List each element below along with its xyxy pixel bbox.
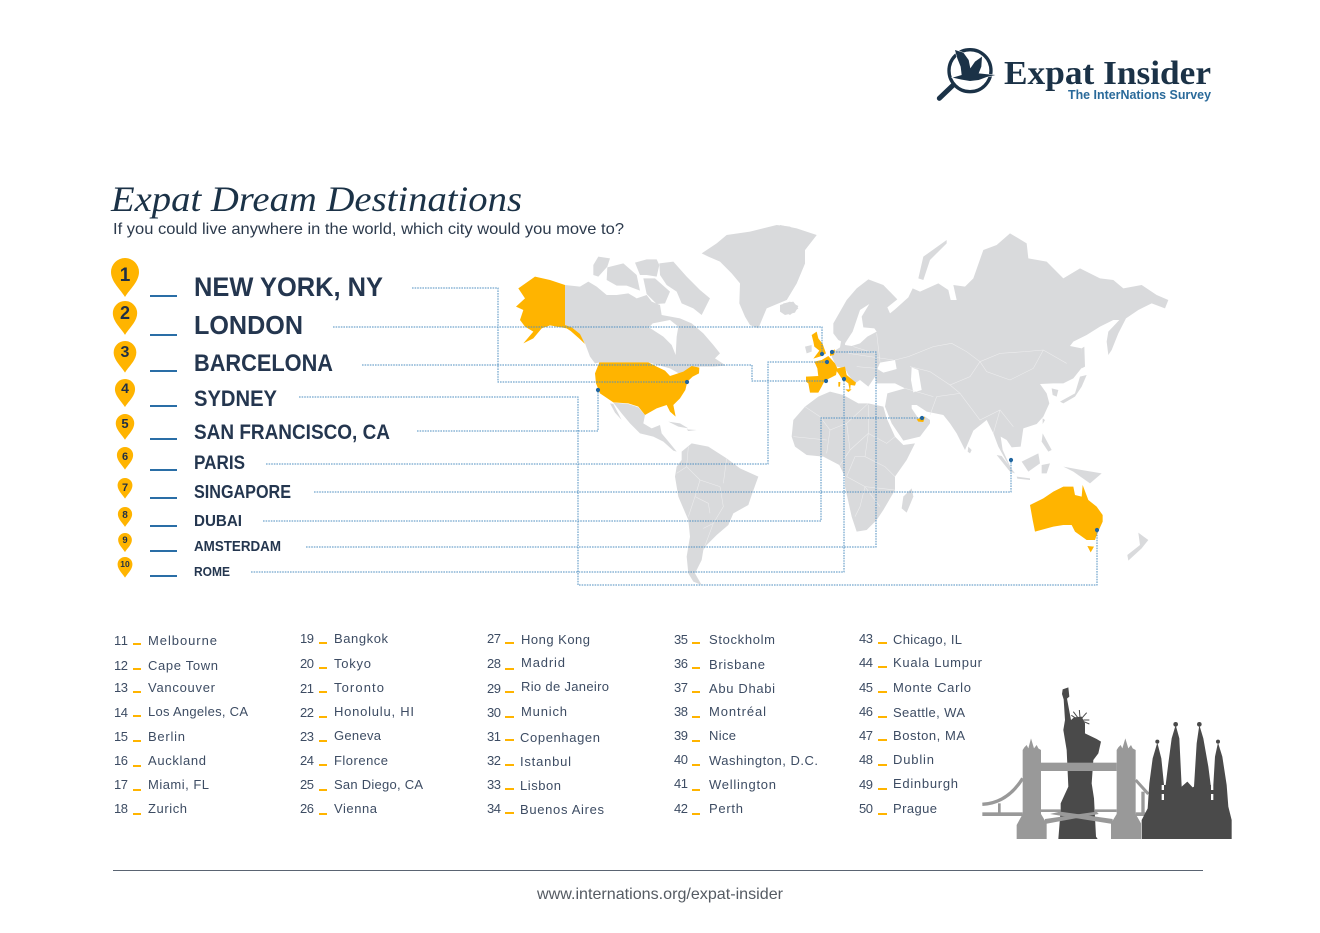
ranks 35 to 42: 41: [674, 776, 688, 791]
Australia (highlighted): [1030, 485, 1103, 540]
ranks 19 to 26: 23: [300, 729, 314, 744]
ranks 35 to 42: 36: [674, 656, 688, 671]
ranks 11 to 18: Auckland: [148, 753, 206, 768]
ranks 43 to 50: 45: [859, 680, 873, 695]
rank 1 New York: 1: [120, 265, 131, 286]
ranks 19 to 26: San Diego, CA: [334, 777, 423, 792]
city location dots: [596, 350, 1099, 532]
rank 4 Sydney: [115, 379, 277, 411]
ranks 35 to 42: 39: [674, 728, 688, 743]
Iceland and Greenland tip: [780, 302, 798, 315]
Mexico and Central America: [613, 403, 677, 452]
ranks 19 to 26: Florence: [334, 753, 388, 768]
ranks 35 to 42: 35: [674, 632, 688, 647]
ranks 35 to 42: Brisbane: [709, 657, 765, 672]
ranks 11 to 18: Vancouver: [148, 680, 216, 695]
map: the Americas: [516, 225, 817, 585]
ranks 43 to 50: 50: [859, 801, 873, 816]
ranks 43 to 50: Dublin: [893, 752, 934, 767]
Hudson Bay: [649, 320, 678, 355]
ranks 19 to 26: Tokyo: [334, 656, 371, 671]
rank 3 Barcelona: [114, 341, 333, 377]
ranks 27 to 34: Copenhagen: [520, 730, 600, 745]
United Kingdom (highlighted): [812, 332, 826, 359]
Japan: [1060, 375, 1087, 403]
ranks 19 to 26: Geneva: [334, 728, 382, 743]
ranks 19 to 26: 21: [300, 681, 314, 696]
Tasmania (highlighted): [1087, 546, 1094, 552]
icon: Tower Bridge: [982, 738, 1148, 839]
Greenland: [702, 225, 817, 328]
ranks 43 to 50: 47: [859, 728, 873, 743]
rank 5 San Francisco: 5: [121, 416, 129, 431]
rank 3 Barcelona: BARCELONA: [194, 350, 333, 377]
ranks 27 to 34: Buenos Aires: [520, 802, 604, 817]
ranks 43 to 50: 46: [859, 704, 873, 719]
ranks 43 to 50: 43: [859, 631, 873, 646]
rank 7 Singapore: SINGAPORE: [194, 482, 291, 502]
ranks 27 to 34: [487, 631, 609, 817]
Netherlands (highlighted): [830, 349, 835, 356]
Africa: [792, 392, 915, 532]
rank 8 Dubai: 8: [122, 510, 128, 521]
rank 8 Dubai: DUBAI: [194, 513, 242, 530]
rank 9 Amsterdam: 9: [122, 535, 128, 546]
logo wordmark: Expat Insider: [1004, 55, 1211, 92]
ranks 11 to 18: 16: [114, 753, 128, 768]
ranks 19 to 26: Honolulu, HI: [334, 704, 414, 719]
ranks 19 to 26: 19: [300, 631, 314, 646]
ranks 11 to 18: Zurich: [148, 801, 187, 816]
ranks 11 to 18: 14: [114, 705, 128, 720]
ranks 35 to 42: 42: [674, 801, 688, 816]
ranks 35 to 42: 38: [674, 704, 688, 719]
Italy (highlighted): [835, 367, 856, 392]
Ireland: [805, 345, 812, 353]
ranks 43 to 50: Kuala Lumpur: [893, 655, 983, 670]
rank 10 Rome: [118, 557, 230, 579]
ranks 11 to 18: 18: [114, 801, 128, 816]
ranks 43 to 50: Edinburgh: [893, 776, 958, 791]
ranks 19 to 26: 22: [300, 705, 314, 720]
ranks 27 to 34: 32: [487, 753, 501, 768]
Spain (highlighted): [806, 376, 825, 393]
ranks 27 to 34: 34: [487, 801, 501, 816]
ranks 27 to 34: Istanbul: [520, 754, 571, 769]
icon: Statue of Liberty: [1058, 687, 1101, 839]
New Zealand: [1127, 533, 1148, 561]
ranks 43 to 50: Prague: [893, 801, 937, 816]
ranks 43 to 50: 48: [859, 752, 873, 767]
subtitle: If you could live anywhere in the world, which city would you move to?: [113, 221, 624, 238]
USA (highlighted): [595, 362, 699, 417]
rank 7 Singapore: [118, 478, 291, 502]
ranks 35 to 42: Perth: [709, 801, 743, 816]
ranks 35 to 42: 40: [674, 752, 688, 767]
ranks 43 to 50: Boston, MA: [893, 728, 965, 743]
ranks 11 to 18: Miami, FL: [148, 777, 209, 792]
footer divider: [113, 870, 1203, 871]
ranks 35 to 42: Abu Dhabi: [709, 681, 775, 696]
rank 2 London: LONDON: [194, 310, 303, 340]
Arctic islands: [593, 257, 798, 315]
Southeast Asian islands: [968, 418, 1102, 483]
ranks 27 to 34: 29: [487, 681, 501, 696]
South America: [675, 443, 758, 585]
ranks 35 to 42: [674, 632, 818, 816]
ranks 19 to 26: Toronto: [334, 680, 384, 695]
ranks 11 to 18: 12: [114, 658, 128, 673]
ranks 11 to 18: Los Angeles, CA: [148, 704, 248, 719]
ranks 27 to 34: Hong Kong: [521, 632, 590, 647]
ranks 11 to 18: Melbourne: [148, 633, 217, 648]
ranks 43 to 50: 49: [859, 777, 873, 792]
ranks 27 to 34: 33: [487, 777, 501, 792]
rank 1 New York: NEW YORK, NY: [194, 272, 383, 302]
ranks 43 to 50: Seattle, WA: [893, 705, 965, 720]
rank 6 Paris: PARIS: [194, 453, 245, 474]
rank 4 Sydney: SYDNEY: [194, 386, 277, 411]
skyline illustration: [982, 687, 1232, 839]
ranks 19 to 26: Bangkok: [334, 631, 388, 646]
Black Sea and Caspian Sea: [877, 360, 897, 373]
Alaska (highlighted): [516, 277, 585, 344]
rank 5 San Francisco: [116, 414, 390, 444]
rank 2 London: [113, 301, 303, 340]
ranks 35 to 42: Stockholm: [709, 632, 775, 647]
rank 3 Barcelona: 3: [121, 344, 130, 361]
connector lines: [251, 288, 1097, 585]
ranks 11 to 18: 13: [114, 680, 128, 695]
ranks 11 to 18: Cape Town: [148, 658, 218, 673]
Madagascar: [902, 488, 913, 513]
rank 4 Sydney: 4: [121, 380, 129, 396]
world map: [251, 225, 1168, 585]
rank 2 London: 2: [120, 303, 130, 323]
rank 10 Rome: ROME: [194, 564, 230, 579]
ranks 11 to 18: 15: [114, 729, 128, 744]
rank 8 Dubai: [118, 507, 242, 530]
ranks 27 to 34: 28: [487, 656, 501, 671]
rank 6 Paris: [117, 447, 245, 474]
ranks 11 to 18: 17: [114, 777, 128, 792]
map: Europe, Africa, Asia, Oceania: [780, 225, 1168, 561]
ranks 27 to 34: Munich: [521, 704, 567, 719]
ranks 19 to 26: 24: [300, 753, 314, 768]
ranks 43 to 50: Monte Carlo: [893, 680, 971, 695]
ranks 35 to 42: Nice: [709, 728, 736, 743]
ranks 43 to 50: 44: [859, 655, 873, 670]
ranks 19 to 26: Vienna: [334, 801, 378, 816]
ranks 27 to 34: Lisbon: [520, 778, 561, 793]
rank 10 Rome: 10: [120, 559, 130, 569]
ranks 35 to 42: Washington, D.C.: [709, 753, 818, 768]
Eurasia with Scandinavia: [832, 233, 1168, 473]
ranks 11 to 18: 11: [114, 633, 128, 648]
ranks 19 to 26: 20: [300, 656, 314, 671]
Novaya Zemlya: [918, 240, 947, 280]
ranks 35 to 42: Wellington: [709, 777, 776, 792]
logo: Expat Insider: [939, 50, 1211, 102]
country borders: [848, 333, 1067, 433]
top 10 ranking: [111, 258, 390, 579]
title: Expat Dream Destinations: [110, 179, 522, 219]
rank 1 New York: [111, 258, 383, 302]
Canada mainland: [565, 282, 726, 375]
footer URL: www.internations.org/expat-insider: [536, 886, 784, 903]
ranks 19 to 26: [300, 631, 423, 816]
ranks 19 to 26: 25: [300, 777, 314, 792]
ranks 43 to 50: Chicago, IL: [893, 632, 962, 647]
rank 9 Amsterdam: AMSTERDAM: [194, 538, 281, 555]
ranks 27 to 34: 27: [487, 631, 501, 646]
ranks 19 to 26: 26: [300, 801, 314, 816]
ranks 27 to 34: Madrid: [521, 655, 565, 670]
rank 9 Amsterdam: [118, 533, 281, 555]
ranks 35 to 42: 37: [674, 680, 688, 695]
ranks 11 to 18: [114, 633, 248, 816]
ranks 11 to 18: Berlin: [148, 729, 185, 744]
UAE (highlighted): [917, 417, 925, 422]
ranks 27 to 34: 31: [487, 729, 501, 744]
ranks 27 to 34: 30: [487, 705, 501, 720]
ranks 35 to 42: Montréal: [709, 704, 766, 719]
Korea: [1052, 388, 1058, 397]
ranks 27 to 34: Rio de Janeiro: [521, 679, 609, 694]
logo tagline: The InterNations Survey: [1068, 88, 1211, 102]
rank 6 Paris: 6: [122, 451, 128, 463]
rank 7 Singapore: 7: [122, 482, 128, 494]
ranks 43 to 50: [859, 631, 983, 816]
icon: magnifier with bird: [939, 50, 995, 98]
icon: Sagrada Familia: [1142, 722, 1232, 839]
France (highlighted): [814, 356, 837, 381]
rank 5 San Francisco: SAN FRANCISCO, CA: [194, 421, 390, 444]
